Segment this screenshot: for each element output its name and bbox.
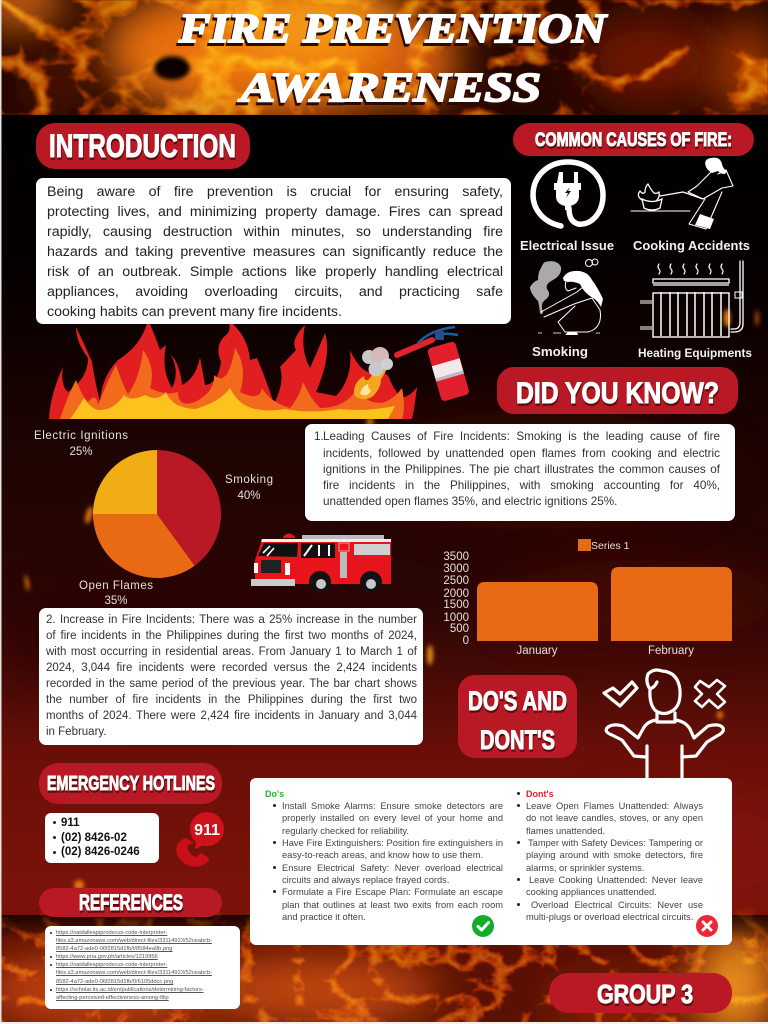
panel: did you know fact 2: recorded in the same period of the previous year. The bar chart shows: [46, 678, 417, 690]
label: heating equipments: Heating Equipments: [638, 346, 752, 360]
title: FIRE PREVENTION: [178, 5, 608, 51]
panel: emergency hotline numbers: [45, 813, 159, 863]
panel: do's and don'ts list: flames unattended.: [526, 826, 605, 836]
panel: did you know fact 1: incidents, followed by unattended open flames from cooking and electric: [323, 446, 720, 460]
icon: cooking accident: [631, 158, 733, 229]
panel: introduction text: protecting lives, and minimizing property damage. Fires can spread: [47, 204, 503, 220]
bar chart: [443, 539, 732, 657]
panel: did you know fact 1: ignitions in the Philippines. The pie chart illustrates the common causes of: [323, 463, 720, 476]
panel: did you know fact 2: in February.: [46, 726, 107, 738]
bar chart: 1000: [443, 612, 469, 624]
illustration: fire truck: [251, 534, 391, 593]
pie chart: 40%: [237, 490, 261, 502]
pie chart: 35%: [104, 595, 128, 607]
panel: did you know fact 2: months of 2024. There were 2,424 fire incidents in January and 3,044: [46, 710, 417, 722]
icon: person smoking: [530, 259, 603, 335]
heading: introduction: [36, 123, 250, 169]
illustration: flames: [49, 320, 417, 419]
heading: common causes of fire: [513, 123, 754, 156]
pie chart: Electric Ignitions: [34, 430, 128, 442]
panel: did you know fact 1: 1.: [314, 430, 324, 443]
panel: introduction text: [36, 178, 511, 324]
panel: do's and don'ts list: alarms, or sprinkler systems.: [526, 863, 644, 873]
heading: introduction: INTRODUCTION: [49, 128, 236, 164]
title: [178, 5, 608, 110]
panel: do's and don'ts list: Formulate a Fire Escape Plan: Formulate an escape: [282, 887, 503, 897]
panel: references list: 8582-4a72-ade0-06f2815d1fb/0/6105ddcc.png: [56, 979, 173, 985]
icon: electrical plug: [533, 162, 603, 226]
panel: did you know fact 2: of fire incidents in the Philippines during the first two months of 2024,: [46, 630, 417, 642]
label: cooking accidents: Cooking Accidents: [633, 239, 750, 253]
heading: references: [39, 888, 222, 917]
panel: references list: files.s3.amazonaws.com/web/direct-files/33114923/52ceabcb-: [56, 938, 212, 944]
icon: 911 phone: 911: [194, 822, 220, 839]
icon: green check: [472, 915, 494, 937]
panel: introduction text: risk of an outbreak. Simple actions like properly handling electrical: [47, 264, 503, 280]
heading: emergency hotlines: EMERGENCY HOTLINES: [47, 773, 215, 795]
panel: did you know fact 2: [39, 608, 423, 745]
panel: did you know fact 2: with most occurring in residential areas. From January 1 to March 1 of: [46, 646, 417, 658]
heading: group 3: GROUP 3: [597, 979, 693, 1009]
panel: references list: files.s3.amazonaws.com/web/direct-files/33114923/52ceabcb-: [56, 970, 212, 976]
title: AWARENESS: [237, 64, 541, 110]
bar chart: January: [517, 645, 558, 657]
heading: do's and dont's: DO'S AND: [468, 686, 567, 716]
panel: did you know fact 2: the number of fire incidents in the Philippines during the first two: [46, 694, 417, 706]
panel: do's and don'ts list: Ensure Electrical Safety: Never overload electrical: [282, 863, 503, 873]
panel: do's and don'ts list: Dont's: [526, 789, 554, 799]
bar chart: 3000: [443, 563, 469, 575]
panel: references list: https://www.pna.gov.ph/articles/1219956: [56, 954, 158, 960]
panel: do's and don'ts list: Leave Open Flames Unattended: Always: [526, 801, 703, 811]
panel: did you know fact 1: fire incidents in the Philippines, with smoking accounting for 40%,: [323, 479, 720, 492]
bar chart: February: [648, 645, 694, 657]
heading: group 3: [549, 973, 732, 1013]
bar chart: 3500: [443, 551, 469, 563]
pie chart: Smoking: [225, 474, 273, 486]
panel: do's and don'ts list: plan that outlines at least two exits from each room: [282, 900, 503, 910]
panel: references list: https://oaidalleapiprodscus-code-interpreter-: [56, 930, 167, 936]
icon: 911 phone: [176, 812, 224, 867]
bar chart: 0: [463, 635, 469, 647]
embers: [84, 506, 94, 524]
icon: person shrugging with check and cross: [604, 670, 725, 778]
panel: do's and don'ts list: multi-plugs or overload electrical circuits.: [526, 912, 693, 922]
panel: references list: affecting-perceived-effectiveness-among-filip: [56, 995, 169, 1001]
panel: do's and don'ts list: Leave Cooking Unattended: Never leave: [529, 875, 703, 885]
panel: introduction text: hazards and taking preventive measures can significantly reduce the: [47, 244, 503, 260]
bar chart: 1500: [443, 599, 469, 611]
pie chart: Open Flames: [79, 580, 153, 592]
panel: references list: https://oaidalleapiprodscus-code-interpreter-: [56, 962, 167, 968]
panel: do's and don'ts list: Tamper with Safety Devices: Tampering or: [528, 838, 703, 848]
bar chart: 500: [450, 623, 469, 635]
icon: fire extinguisher spraying: [354, 327, 470, 402]
panel: emergency hotline numbers: (02) 8426-0246: [61, 846, 140, 858]
panel: do's and don'ts list: Do's: [265, 789, 284, 799]
heading: emergency hotlines: [39, 763, 222, 804]
panel: did you know fact 2: 2024, 3,044 fire incidents were recorded versus the 2,424 incidents: [46, 662, 417, 674]
panel: do's and don'ts list: cooking appliances unattended.: [526, 887, 657, 897]
panel: emergency hotline numbers: (02) 8426-02: [61, 832, 127, 844]
panel: do's and don'ts list: easy-to-reach areas, and know how to use them.: [282, 850, 483, 860]
bar chart: Series 1: [591, 540, 630, 552]
panel: emergency hotline numbers: 911: [61, 817, 80, 829]
panel: introduction text: appliances, avoiding overloading circuits, and practicing safe: [47, 284, 503, 300]
panel: do's and don'ts list: circuits and always replace frayed cords.: [282, 875, 449, 885]
pie chart: 25%: [69, 446, 93, 458]
panel: introduction text: cooking habits can prevent many fire incidents.: [47, 304, 342, 320]
heading: did you know: [497, 367, 738, 414]
icon: heating radiator: [640, 261, 743, 337]
panel: introduction text: rapidly, causing destruction within minutes, so understanding fire: [47, 224, 503, 240]
heading: did you know: DID YOU KNOW?: [516, 377, 719, 410]
panel: references list: [45, 926, 240, 1009]
bar chart: 2000: [443, 588, 469, 600]
panel: references list: https://scholar.its.ac.id/en/publications/determining-factors-: [56, 987, 204, 993]
panel: did you know fact 2: 2. Increase in Fire Incidents: There was a 25% increase in the number: [46, 614, 417, 626]
panel: did you know fact 1: Leading Causes of Fire Incidents: Smoking is the leading cause of fire: [323, 430, 720, 443]
panel: do's and don'ts list: Have Fire Extinguishers: Position fire extinguishers in: [282, 838, 503, 848]
panel: do's and don'ts list: Overload Electrical Circuits: Never use: [531, 900, 703, 910]
panel: introduction text: Being aware of fire prevention is crucial for ensuring safety,: [47, 184, 503, 200]
pie chart: [34, 430, 273, 607]
heading: do's and dont's: DONT'S: [480, 725, 555, 755]
panel: do's and don'ts list: do not leave candles, stoves, or any open: [526, 813, 703, 823]
icon: red cross: [696, 915, 718, 937]
panel: do's and don'ts list: regularly checked for reliability.: [282, 826, 409, 836]
panel: do's and don'ts list: properly installed on every level of your home and: [282, 813, 503, 823]
panel: do's and don'ts list: playing around with smoke detectors, fire: [526, 850, 703, 860]
panel: do's and don'ts list: [250, 778, 732, 945]
heading: do's and dont's: [458, 675, 577, 758]
bar chart: 2500: [443, 575, 469, 587]
panel: references list: 8582-4a72-ade0-06f2815d1fb/t/8584ea9b.png: [56, 946, 172, 952]
panel: do's and don'ts list: and practice it often.: [282, 912, 366, 922]
panel: do's and don'ts list: Install Smoke Alarms: Ensure smoke detectors are: [282, 801, 503, 811]
heading: references: REFERENCES: [79, 890, 183, 915]
panel: did you know fact 1: [305, 424, 735, 521]
label: electrical issue: Electrical Issue: [520, 239, 614, 253]
panel: did you know fact 1: unattended open flames 35%, and electric ignitions 25%.: [323, 495, 617, 508]
label: smoking: Smoking: [532, 345, 588, 359]
